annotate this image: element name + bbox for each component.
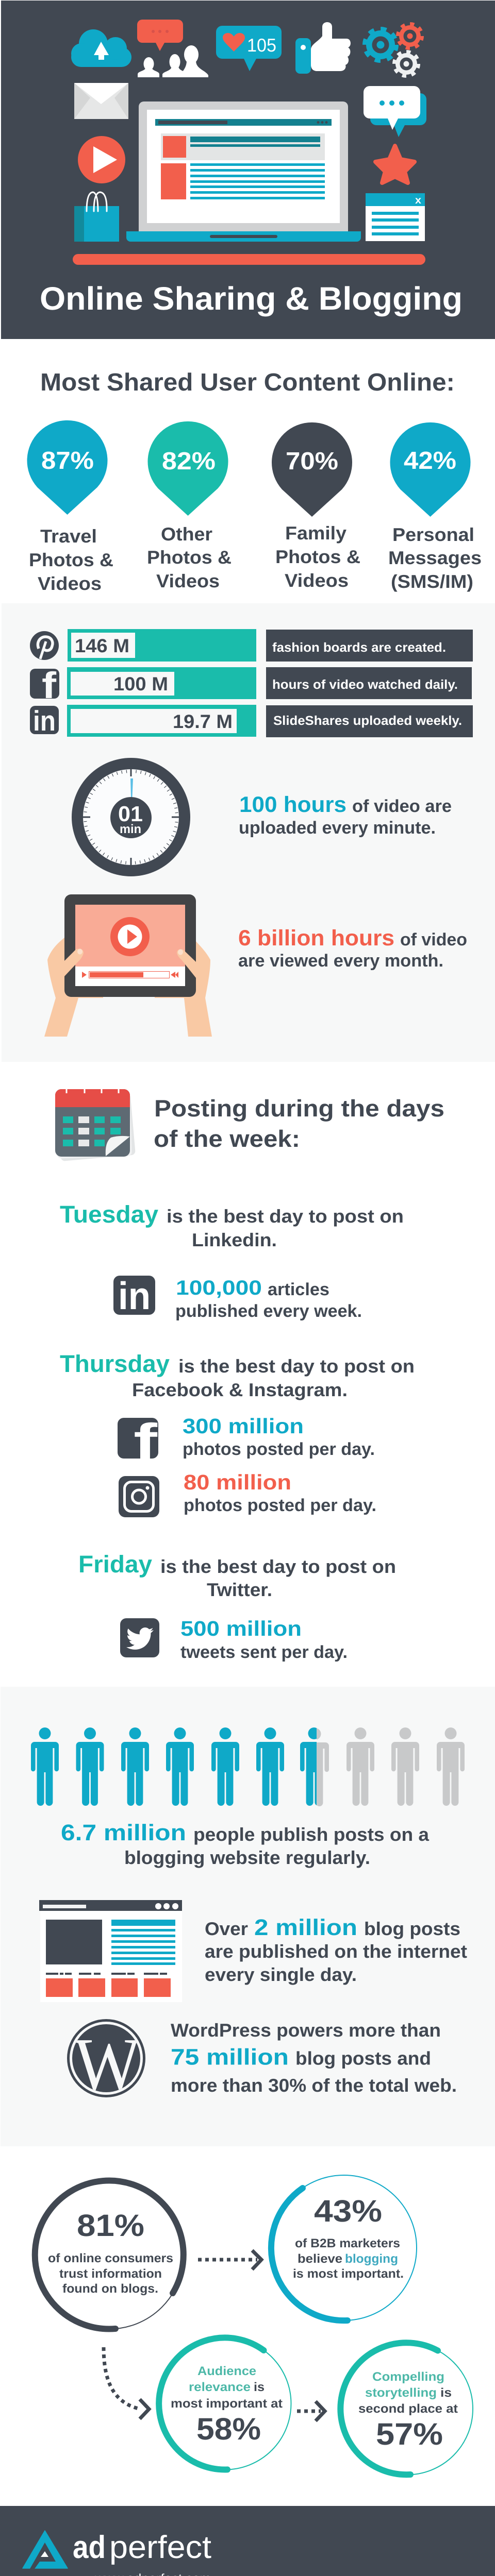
circle: 58%: Audience: [197, 2364, 256, 2378]
pin: 70% family: 70%: [286, 448, 338, 475]
heading: most shared: Most Shared User Content Online:: [40, 369, 455, 396]
red bar: [73, 254, 425, 265]
circle: 57%: storytelling: [365, 2386, 437, 2400]
text: 6 billion hours: [238, 926, 467, 971]
title: Online Sharing & Blogging: [40, 281, 463, 317]
text: 2 million: blog posts: [364, 1918, 460, 1939]
text: 6.7 million: 6.7 million: [61, 1820, 186, 1845]
text: wordpress 75 million: blog posts and: [295, 2047, 431, 2069]
circle: 58%: 58%: [196, 2412, 261, 2446]
text: 500 million: 500 million: [180, 1617, 302, 1640]
pin: 87% travel: Photos &: [29, 549, 113, 570]
icon: instagram: [119, 1476, 159, 1517]
text: 2 million: [205, 1915, 467, 1985]
text: 300 million: [183, 1414, 375, 1459]
circle: 57%: is: [440, 2386, 452, 2400]
icon: linkedin: in: [118, 1274, 151, 1317]
chart: people pictogram: [31, 1727, 465, 1806]
text: thursday: is the best day to post on: [178, 1355, 415, 1377]
row: facebook: hours of video watched daily.: [272, 677, 458, 692]
text: tuesday: [60, 1200, 404, 1250]
pin: 42% personal messages: Messages: [388, 547, 482, 568]
pin: 70% family: Family: [285, 522, 346, 544]
icon: twitter: [120, 1618, 159, 1657]
text: wordpress 75 million: more than 30% of the total web.: [171, 2075, 457, 2096]
pin: 87% travel: 87%: [41, 447, 94, 474]
pin: 42% personal messages: [388, 422, 482, 592]
icon: pinterest: [30, 631, 59, 660]
row: facebook: [30, 665, 472, 706]
text: friday: [78, 1550, 396, 1600]
circle: 81%: of online consumers: [48, 2251, 173, 2265]
pin: 82% other: Videos: [156, 570, 220, 591]
icon: blog browser window: [39, 1900, 182, 2002]
icon: facebook: [30, 665, 59, 706]
icon: shopping bag: [74, 192, 119, 242]
icon: cloud upload: [71, 29, 131, 67]
heading: posting days: of the week:: [154, 1125, 300, 1152]
icon: facebook: f: [134, 1413, 158, 1469]
text: 500 million: tweets sent per day.: [180, 1642, 348, 1662]
icon: facebook: [118, 1413, 158, 1469]
icon: thumbs up: [295, 22, 351, 74]
text: 100,000 articles: articles: [268, 1280, 329, 1299]
text: 100,000 articles: published every week.: [175, 1301, 362, 1321]
text: 6.7 million: [61, 1820, 430, 1868]
text: 6 billion hours: are viewed every month.: [238, 951, 443, 971]
text: 500 million: [180, 1617, 348, 1662]
circle: 57%: [340, 2343, 473, 2475]
icon: calendar: [55, 1089, 136, 1161]
pin: 42% personal messages: Personal: [392, 524, 474, 545]
icon: wordpress: W: [74, 2023, 140, 2107]
row: linkedin: [30, 705, 473, 737]
pin: 42% personal messages: 42%: [404, 447, 456, 474]
circle: 81%: trust information: [59, 2267, 162, 2281]
circle: 58%: most important at: [171, 2397, 283, 2411]
text: 100 hours: 100 hours: [239, 792, 346, 817]
icon: envelope: [74, 83, 128, 119]
panel: most shared pins: [27, 420, 482, 594]
pin: 82% other: [147, 421, 232, 591]
row: linkedin: 19.7 M: [173, 711, 233, 732]
circle: 57%: 57%: [376, 2417, 443, 2451]
row: pinterest: 146 M: [75, 635, 129, 656]
circle: 43%: believe: [298, 2252, 342, 2266]
circle: 81%: [35, 2180, 184, 2329]
pin: 82% other: Other: [161, 523, 212, 545]
text: 2 million: are published on the internet: [205, 1941, 467, 1962]
circle: 57%: second place at: [358, 2402, 458, 2416]
icon: heart notification bubble: 105: [247, 35, 276, 56]
text: tuesday: is the best day to post on: [167, 1206, 404, 1227]
text: wordpress 75 million: 75 million: [171, 2044, 289, 2070]
icon: people: [138, 45, 208, 77]
text: friday: Twitter.: [207, 1579, 272, 1600]
text: 300 million: 300 million: [183, 1414, 304, 1438]
row: pinterest: [30, 629, 473, 662]
arrow: 81% to 43%: [198, 2250, 261, 2269]
circle: 43%: is most important.: [293, 2267, 404, 2281]
text: 6 billion hours: 6 billion hours: [238, 926, 394, 951]
text: 100,000 articles: [175, 1277, 362, 1321]
icon: linkedin: in: [33, 705, 56, 737]
icon: play button: [78, 136, 125, 183]
circle: 43%: 43%: [314, 2194, 382, 2228]
text: wordpress 75 million: WordPress powers more than: [171, 2020, 441, 2041]
pin: 82% other: Photos &: [147, 547, 232, 568]
circle: 58%: [159, 2337, 291, 2470]
text: 6.7 million: people publish posts on a: [193, 1824, 430, 1845]
text: thursday: [60, 1350, 415, 1400]
text: friday: is the best day to post on: [160, 1556, 396, 1577]
heading: posting days: [154, 1095, 444, 1152]
text: thursday: Thursday: [60, 1350, 170, 1377]
text: 300 million: photos posted per day.: [183, 1439, 375, 1459]
circle: 43%: blogging: [345, 2252, 398, 2266]
text: 6.7 million: blogging website regularly.: [124, 1847, 370, 1868]
panel: social stats and video: [2, 603, 495, 1062]
text: 2 million: 2 million: [254, 1915, 357, 1940]
heading: posting days: Posting during the days: [154, 1095, 444, 1122]
panel: marketers circles: [35, 2175, 473, 2475]
text: 100 hours: of video are: [352, 796, 452, 816]
circle: 57%: Compelling: [372, 2370, 444, 2384]
arrow: 58% to 57%: [297, 2401, 325, 2421]
text: 100 hours: uploaded every minute.: [239, 818, 436, 838]
text: thursday: Facebook & Instagram.: [132, 1379, 348, 1400]
icon: star: [375, 146, 415, 183]
pin: 70% family: Videos: [285, 570, 349, 591]
icon: stopwatch: [72, 758, 190, 876]
icon: stopwatch: 01: [118, 802, 143, 826]
logo wordmark: ad: [73, 2530, 106, 2565]
circle: 58%: is: [254, 2380, 265, 2394]
pin: 87% travel: Travel: [40, 526, 97, 547]
icon: window: x: [415, 195, 421, 206]
text: 6 billion hours: of video: [400, 930, 467, 950]
panel: footer: [0, 2506, 495, 2576]
text: 80 million: photos posted per day.: [184, 1496, 376, 1515]
circle: 81%: 81%: [77, 2208, 144, 2243]
icon: tablet with hands: [44, 894, 212, 1037]
icon: heart notification bubble: [216, 26, 282, 71]
circle: 58%: relevance: [189, 2380, 251, 2394]
text: 100,000 articles: 100,000: [176, 1277, 262, 1299]
pin: 70% family: Photos &: [275, 546, 360, 567]
icon: gears: [365, 24, 422, 76]
pin: 82% other: 82%: [162, 448, 216, 475]
row: facebook: 100 M: [113, 673, 168, 694]
pin: 87% travel: Videos: [38, 573, 102, 594]
circle: 43%: [271, 2175, 417, 2320]
text: 100 hours: [239, 792, 452, 838]
pin: 87% travel: [27, 420, 113, 594]
text: tuesday: Tuesday: [60, 1200, 158, 1228]
icon: chat bubbles: [364, 86, 426, 137]
icon: window: [366, 193, 425, 241]
text: 2 million: Over: [205, 1918, 248, 1939]
text: friday: Friday: [78, 1550, 152, 1578]
icon: stopwatch: min: [120, 822, 141, 836]
text: 80 million: 80 million: [184, 1470, 291, 1494]
text: wordpress 75 million: [171, 2020, 457, 2096]
row: pinterest: fashion boards are created.: [272, 640, 446, 655]
arrow: curved 81% to 58%: [104, 2347, 149, 2419]
icon: laptop: [126, 101, 361, 242]
text: 2 million: every single day.: [205, 1964, 357, 1985]
text: tuesday: Linkedin.: [192, 1229, 277, 1250]
circle: 81%: found on blogs.: [62, 2282, 158, 2296]
logo wordmark: perfect: [109, 2530, 211, 2565]
circle: 43%: of B2B marketers: [295, 2236, 400, 2250]
icon: adperfect logo: [23, 2531, 68, 2569]
pin: 42% personal messages: (SMS/IM): [391, 571, 473, 592]
panel: blogging stats: [31, 1727, 467, 2097]
text: 80 million: [184, 1470, 376, 1515]
panel: header: [1, 1, 495, 339]
row: linkedin: SlideShares uploaded weekly.: [273, 714, 462, 728]
icon: facebook: f: [42, 665, 57, 706]
icon: red speech bubble: [137, 20, 183, 51]
pin: 70% family: [272, 422, 360, 591]
